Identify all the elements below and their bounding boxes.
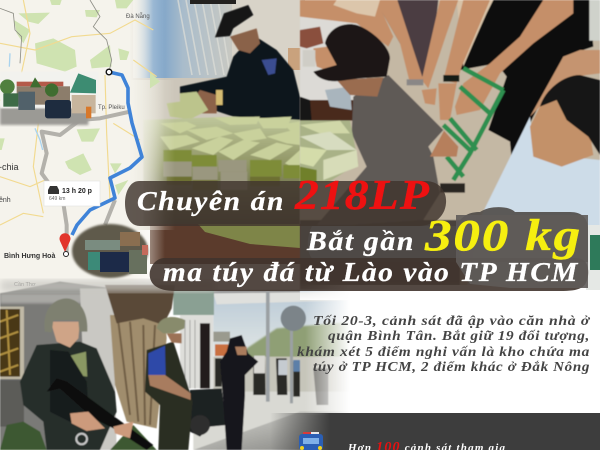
posts bbox=[266, 292, 270, 402]
banner: Bat gan bbox=[308, 207, 588, 262]
bricks seen at left bbox=[300, 121, 358, 183]
map panel bbox=[0, 0, 165, 300]
icon: destination pin bbox=[59, 233, 70, 256]
water bbox=[9, 53, 43, 150]
banner: Chuyen an bbox=[125, 181, 446, 226]
round inset photo: arrested group bbox=[72, 224, 148, 278]
wall bbox=[0, 282, 113, 450]
photo: officer stacking bricks (upper middle) bbox=[125, 0, 315, 264]
place label: Binh Hung Hoa: Bình Hưng Hoà bbox=[4, 253, 55, 260]
drug bricks pile bbox=[143, 117, 300, 225]
motorbike bbox=[190, 388, 227, 437]
building bbox=[173, 290, 214, 315]
banner: ma tuy da bbox=[150, 258, 588, 291]
map to photo soft transition bbox=[0, 280, 215, 292]
route info box: 13 h 20 p bbox=[62, 188, 92, 195]
route start marker bbox=[106, 69, 112, 75]
paragraph line 1: Tối 20-3, cảnh sát đã ập vào căn nhà ở bbox=[313, 314, 591, 329]
gray road bbox=[42, 112, 130, 253]
standing man shirt bbox=[375, 0, 438, 77]
white text background fade bbox=[300, 225, 600, 415]
headline banners bbox=[125, 173, 588, 291]
place label: Da Nang: Đà Nẵng bbox=[126, 13, 150, 20]
officer bbox=[167, 5, 300, 120]
route info box: 649 km bbox=[49, 196, 65, 202]
map inset photo: checkpoint bbox=[0, 72, 98, 125]
photo: detained suspects (upper right) bbox=[300, 0, 600, 290]
officer on phone bbox=[220, 335, 258, 450]
place label: Can Tho: Cần Thơ bbox=[14, 282, 36, 288]
headline: 218LP: 218LP bbox=[294, 173, 430, 219]
headline: Chuyen an: Chuyên án bbox=[137, 186, 285, 216]
standing arms bbox=[300, 0, 573, 120]
dark clothed figure bbox=[460, 0, 593, 160]
headline: Bat gan: Bắt gần bbox=[306, 226, 415, 256]
headline: 300 kg: 300 kg bbox=[424, 211, 582, 260]
map green areas bbox=[0, 0, 160, 195]
icon: police car bbox=[299, 432, 323, 450]
road sign bbox=[281, 306, 306, 331]
map borders bbox=[0, 0, 112, 75]
paragraph line 3: khám xét 5 điểm nghi vấn là kho chứa ma bbox=[297, 345, 590, 360]
headline: ma tuy da tu Lao vao TP HCM: ma túy đá từ Lào vào TP HCM bbox=[163, 257, 579, 287]
gray shirt suspect bbox=[313, 24, 458, 225]
plants bbox=[0, 422, 157, 450]
paragraph line 4: túy ở TP HCM, 2 điểm khác ở Đắk Nông bbox=[313, 360, 590, 375]
intro paragraph bbox=[297, 314, 591, 375]
route info box bbox=[44, 181, 100, 206]
paragraph line 2: quận Bình Tân. Bắt giữ 19 đối tượng, bbox=[328, 329, 590, 344]
man in light shirt bbox=[467, 50, 600, 290]
place label: Tp. Pleiku: Tp. Pleiku bbox=[98, 105, 125, 111]
dark stat bar bbox=[270, 413, 600, 450]
soldier left bbox=[20, 298, 153, 450]
soldier right bbox=[145, 317, 193, 450]
blue route bbox=[72, 72, 142, 235]
bystanders bbox=[215, 357, 328, 405]
map roads bbox=[0, 0, 157, 225]
palm tree bbox=[110, 315, 167, 428]
lower photo strip bbox=[0, 282, 353, 450]
green bench bbox=[443, 68, 503, 180]
right-side scene bbox=[213, 290, 353, 360]
